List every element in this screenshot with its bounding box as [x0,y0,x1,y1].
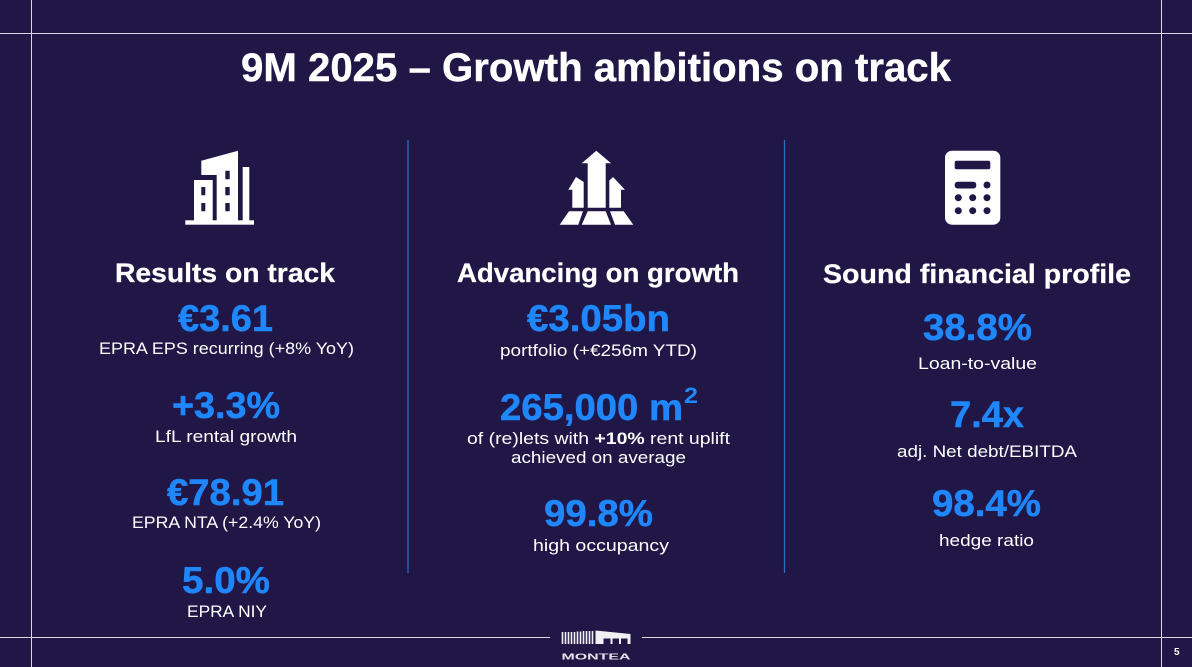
page number: 5 [1174,647,1180,658]
metric: re-lets [467,383,730,467]
panel: advancing on growth [457,151,739,555]
logo: Montea [562,630,630,662]
panel: sound financial profile [823,151,1131,550]
metric: loan-to-value: 38.8% [923,307,1032,348]
metric: hedge ratio: hedge ratio [939,531,1034,550]
metric: EPRA NTA: €78.91 [167,472,284,513]
icon: growth arrows [560,151,633,225]
metric: net debt / EBITDA: adj. Net debt/EBITDA [897,442,1078,461]
metric: hedge ratio [932,483,1041,550]
logo: Montea: MONTEA [562,652,630,662]
metric: re-lets: achieved on average [511,448,686,467]
metric: occupancy: high occupancy [533,536,670,555]
metric: EPRA NIY: 5.0% [182,560,270,601]
metric: portfolio [500,298,697,360]
metric: net debt / EBITDA [897,394,1078,461]
metric: EPRA EPS [99,298,354,358]
metric: EPRA NIY [182,560,270,621]
metric: EPRA NTA: EPRA NTA (+2.4% YoY) [132,513,321,532]
metric: re-lets: of (re)lets with +10% rent uplift [467,429,730,448]
icon: buildings [185,151,254,225]
heading: results on track: Results on track [115,258,336,288]
metric: loan-to-value: Loan-to-value [918,354,1037,373]
icon: calculator [945,151,1000,225]
metric: EPRA NTA [132,472,321,532]
metric: re-lets: 265,000 m [500,387,683,428]
metric: net debt / EBITDA: 7.4x [950,394,1024,435]
heading: sound financial profile: Sound financial profile [823,259,1131,289]
metric: occupancy: 99.8% [544,493,653,534]
metric: EPRA NIY: EPRA NIY [187,602,267,621]
panel: results on track [99,151,354,621]
metric: hedge ratio: 98.4% [932,483,1041,524]
metric: portfolio: €3.05bn [527,298,670,339]
metric: LfL rental growth [155,385,297,446]
metric: LfL rental growth: +3.3% [172,385,280,426]
metric: loan-to-value [918,307,1037,373]
metric: LfL rental growth: LfL rental growth [155,427,297,446]
title: 9M 2025 – Growth ambitions on track [241,46,952,90]
metric: EPRA EPS: EPRA EPS recurring (+8% YoY) [99,339,354,358]
heading: advancing on growth: Advancing on growth [457,258,739,288]
metric: occupancy [533,493,670,555]
metric: portfolio: portfolio (+€256m YTD) [500,341,697,360]
metric: EPRA EPS: €3.61 [178,298,273,339]
metric: re-lets: 2 [684,383,698,408]
